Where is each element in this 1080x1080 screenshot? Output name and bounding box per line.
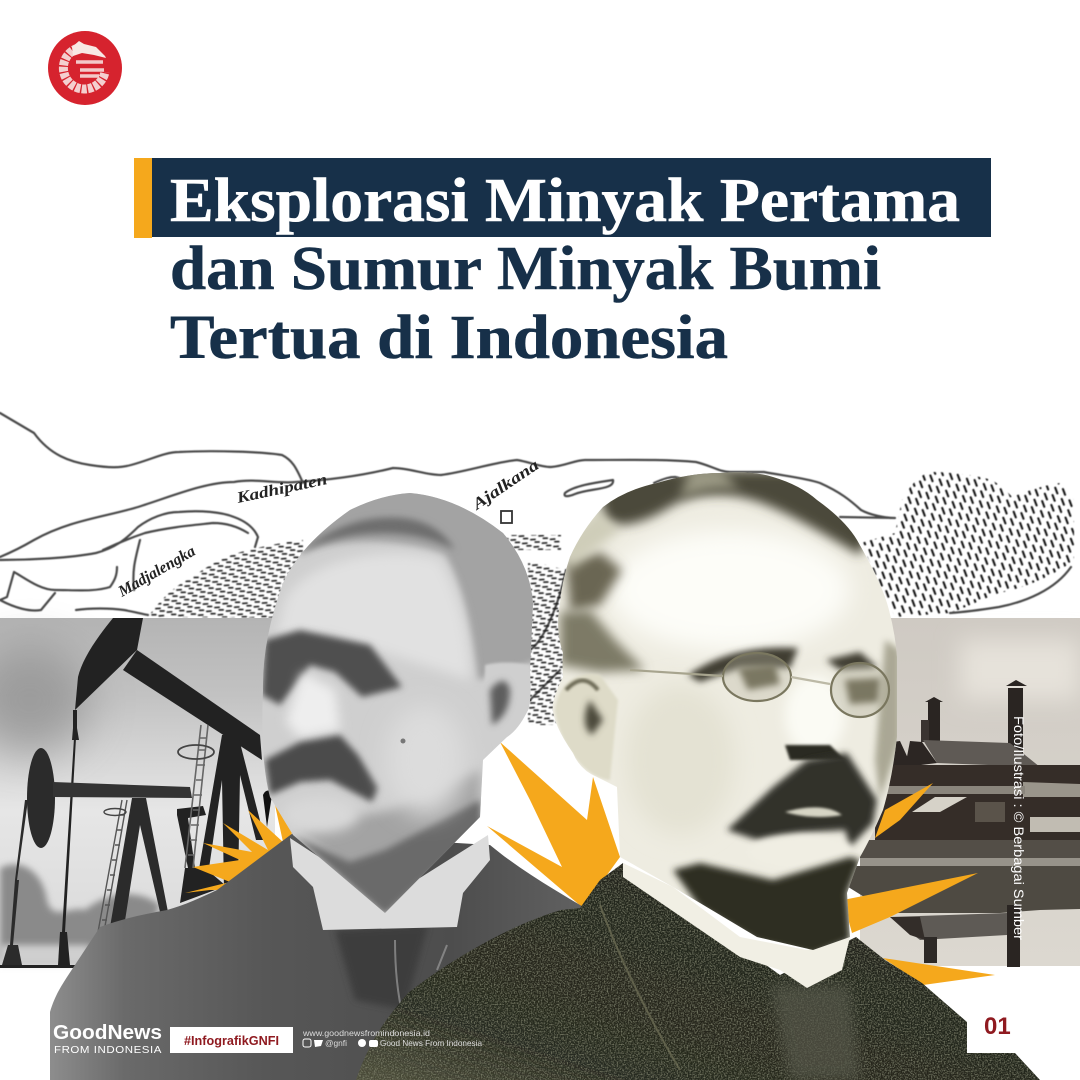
map handwriting labels [115,457,542,601]
tie area [770,985,860,1080]
moustache [727,753,877,847]
title line 1: Eksplorasi Minyak Pertama [170,167,960,235]
map square symbol [501,511,512,523]
ladder big [185,725,208,868]
jacket [356,863,1040,1080]
title highlight band [152,158,991,237]
roofs [885,741,937,767]
brow and eye shadow [262,630,402,705]
lower lip [785,807,842,817]
water reflection [890,913,1007,940]
logo: red circular emblem [48,31,122,105]
lapel line [600,905,680,1070]
map sketch lines [0,413,1071,700]
footer: hashtag box: #InfografikGNFI [184,1034,279,1048]
collar [623,863,850,988]
hair side [566,552,622,612]
right portrait: man with glasses [356,465,1040,1080]
light lapel stroke [395,940,447,1050]
footer: brand logo: FROM INDONESIA [54,1044,162,1056]
chin [753,830,852,850]
hair top [600,470,900,555]
title [134,158,991,372]
yellow burst left [185,805,292,893]
ring small [104,808,126,816]
building body [875,765,1080,840]
footer: website and social handles: Good News From Indonesia [380,1038,482,1048]
ladder small [98,800,127,932]
footer: website and social handles: www.goodnewsfromindonesia.id [302,1028,430,1038]
map forest centre [506,535,566,725]
head [545,465,905,965]
map forest left [148,540,303,618]
map forest right [861,472,1074,617]
page number: 01 [984,1013,1011,1040]
footer: hashtag box [170,1027,293,1053]
center white burst backdrop [490,726,590,900]
footer: brand logo [53,1022,162,1056]
ear [555,674,618,780]
map handwriting labels: Madjalengka [115,543,198,601]
footer: website and social handles [302,1028,482,1048]
forehead highlight [610,530,850,650]
head [255,485,540,925]
neck shade [303,770,482,864]
title line 2: dan Sumur Minyak Bumi [170,235,881,303]
map handwriting labels: Ajalkana [469,457,542,514]
big pump jack [58,618,265,965]
glasses [630,653,889,717]
title line 3: Tertua di Indonesia [170,304,728,372]
collar [290,835,490,930]
mole [400,738,406,744]
brows [688,648,798,682]
yellow burst center [487,742,620,908]
photo: oil pump jacks [0,618,275,968]
title accent bar [134,158,152,238]
footer: website and social handles: @gnfi [325,1038,347,1048]
nose shadow [785,745,845,760]
moustache [265,735,378,802]
jacket [50,833,585,1080]
trees [0,864,160,960]
chimneys [928,702,940,742]
left portrait: man in grey [50,485,585,1080]
ring big [178,745,214,759]
tie [335,925,428,1010]
hair [300,485,540,680]
forehead [275,553,470,680]
beard [673,857,860,955]
yellow burst right [843,783,995,985]
cheek [628,690,732,830]
rotated photo credit: Foto/Ilustrasi : © Berbagai Sumber [1011,716,1027,940]
footer: brand logo: GoodNews [53,1022,162,1044]
ground [860,840,1080,858]
small pump jack [2,748,192,965]
right edge shadow [875,640,900,800]
ear [484,662,528,680]
eyes [738,664,780,690]
photo: oil refinery buildings [845,618,1080,967]
cheek light [385,705,465,815]
map handwriting labels: Kadhipaten [234,471,329,507]
nose highlight [286,672,340,738]
